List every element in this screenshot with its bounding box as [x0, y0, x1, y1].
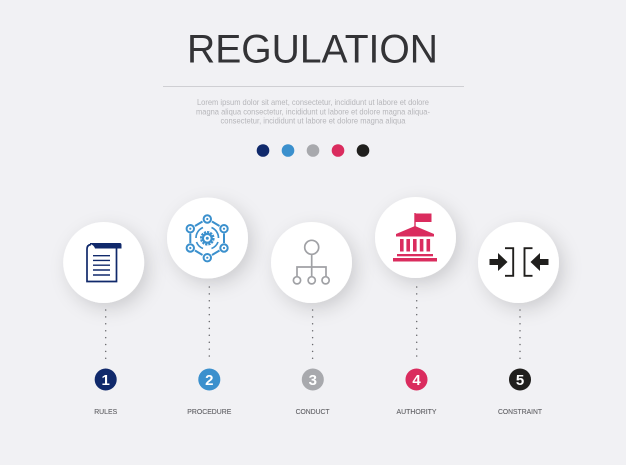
circle: constraint	[478, 222, 559, 303]
dotted connector	[312, 310, 314, 362]
intro text	[196, 97, 430, 126]
number badge 2	[198, 368, 220, 390]
icon: document	[87, 243, 122, 282]
label: RULES	[94, 409, 118, 416]
circle: authority	[375, 197, 456, 278]
icon: government building	[393, 213, 437, 262]
intro text: Lorem ipsum dolor sit amet, consectetur, incididunt ut labore et dolore	[197, 97, 429, 107]
number badge 4	[406, 368, 428, 390]
circle: procedure	[167, 198, 248, 278]
label: AUTHORITY	[396, 409, 437, 416]
item 3: conduct	[271, 222, 352, 416]
dotted connector	[105, 310, 107, 362]
number badge 1: 1	[102, 372, 110, 389]
dotted connector	[519, 310, 521, 362]
number badge 5: 5	[516, 372, 524, 389]
label: CONDUCT	[296, 409, 330, 416]
label: PROCEDURE	[187, 409, 232, 416]
title: REGULATION	[187, 28, 438, 72]
label: CONSTRAINT	[498, 409, 543, 416]
intro text: consectetur, incididunt ut labore et dolore magna aliqua	[220, 116, 406, 126]
dotted connector	[416, 287, 418, 362]
icon: gear network	[187, 215, 228, 261]
circle: rules	[63, 222, 144, 303]
item 5: constraint	[478, 222, 559, 416]
number badge 3: 3	[309, 372, 317, 389]
number badge 3	[302, 368, 324, 390]
item 4: authority	[375, 197, 456, 416]
dotted connector	[208, 287, 210, 362]
icon: hierarchy	[293, 240, 329, 284]
circle: conduct	[271, 222, 352, 303]
item 2: procedure	[167, 198, 248, 416]
icon: inward arrows and brackets	[490, 248, 548, 276]
number badge 1	[95, 368, 117, 390]
number badge 4: 4	[412, 372, 421, 389]
number badge 2: 2	[205, 372, 213, 389]
intro text: magna aliqua consectetur, incididunt ut labore et dolore magna aliqua-	[196, 106, 430, 116]
colour legend dots	[257, 144, 369, 157]
item 1: rules	[63, 222, 144, 416]
number badge 5	[509, 368, 531, 390]
